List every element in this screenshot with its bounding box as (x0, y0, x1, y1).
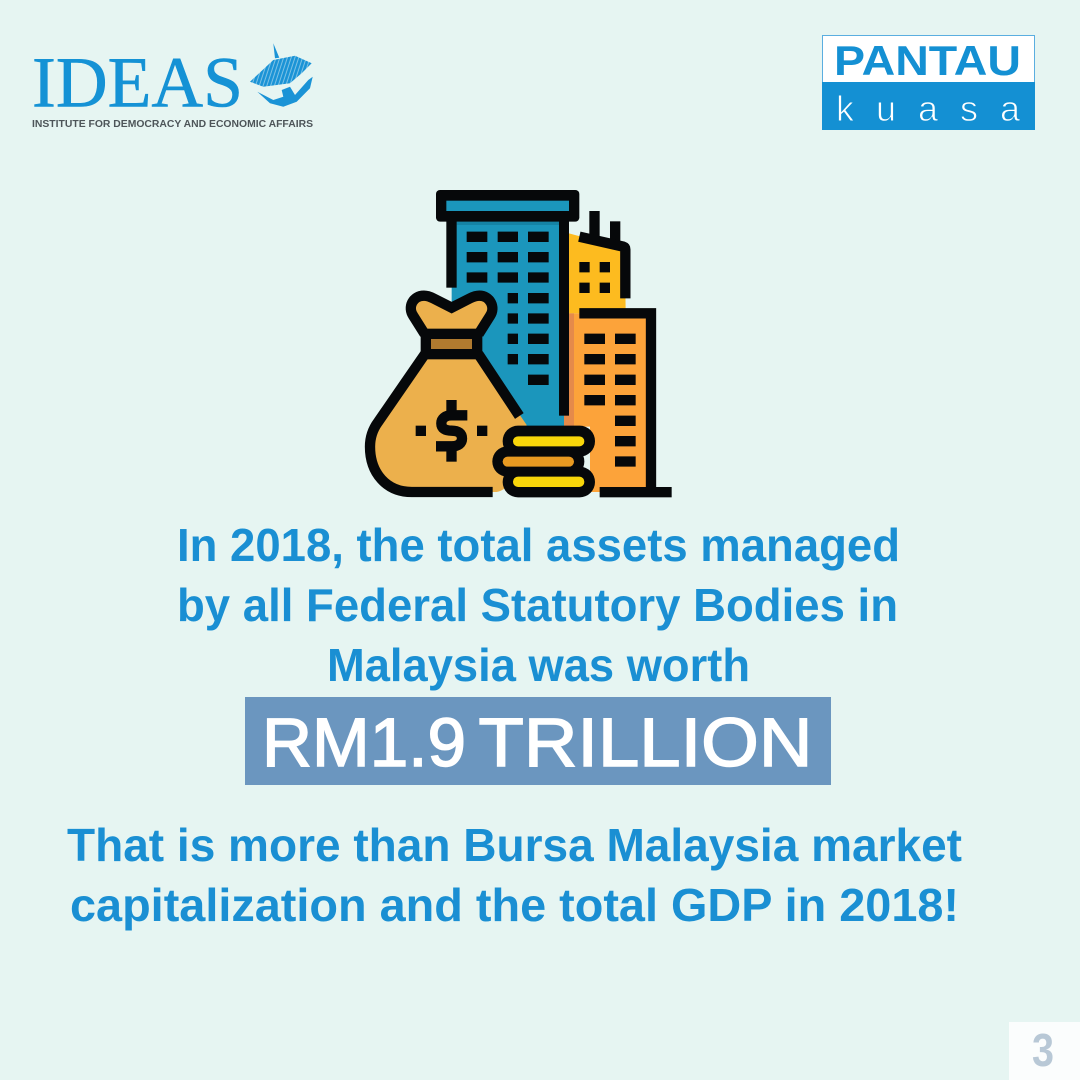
tower right wall (559, 220, 569, 416)
headline line 1: In 2018, the total assets managed (177, 519, 900, 571)
PANTAU wordmark: PANTAU (834, 37, 1021, 84)
headline text (177, 519, 900, 691)
callout background (245, 697, 831, 785)
icon: buildings, money bag and coins (370, 190, 672, 497)
comparison line 1: That is more than Bursa Malaysia market (67, 819, 962, 871)
comparison text (67, 819, 962, 931)
callout value: TRILLION (478, 704, 812, 781)
IDEAS tagline: INSTITUTE FOR DEMOCRACY AND ECONOMIC AFFAIRS (32, 118, 313, 130)
comparison line 2: capitalization and the total GDP in 2018! (70, 879, 959, 931)
headline line 2: by all Federal Statutory Bodies in (177, 579, 898, 631)
page number digit: 3 (1032, 1024, 1054, 1076)
icon: dollar sign (416, 400, 487, 462)
money bag (370, 296, 527, 492)
logo: IDEAS (32, 42, 313, 130)
page number background (1009, 1022, 1080, 1080)
logo blue bottom panel (822, 82, 1035, 130)
callout value: RM1.9 (262, 704, 466, 781)
IDEAS wordmark: IDEAS (32, 42, 243, 122)
orange building (564, 313, 672, 497)
yellow building (569, 211, 626, 313)
headline line 3: Malaysia was worth (327, 639, 750, 691)
callout: RM1.9 trillion (245, 697, 831, 785)
logo: Pantau Kuasa (822, 36, 1035, 130)
icon: IDEAS bird (250, 43, 313, 107)
blue tower (436, 190, 579, 428)
kuasa wordmark: kuasa (836, 88, 1021, 129)
logo white top panel (822, 36, 1034, 82)
page number (1009, 1022, 1080, 1080)
coins (492, 426, 595, 497)
